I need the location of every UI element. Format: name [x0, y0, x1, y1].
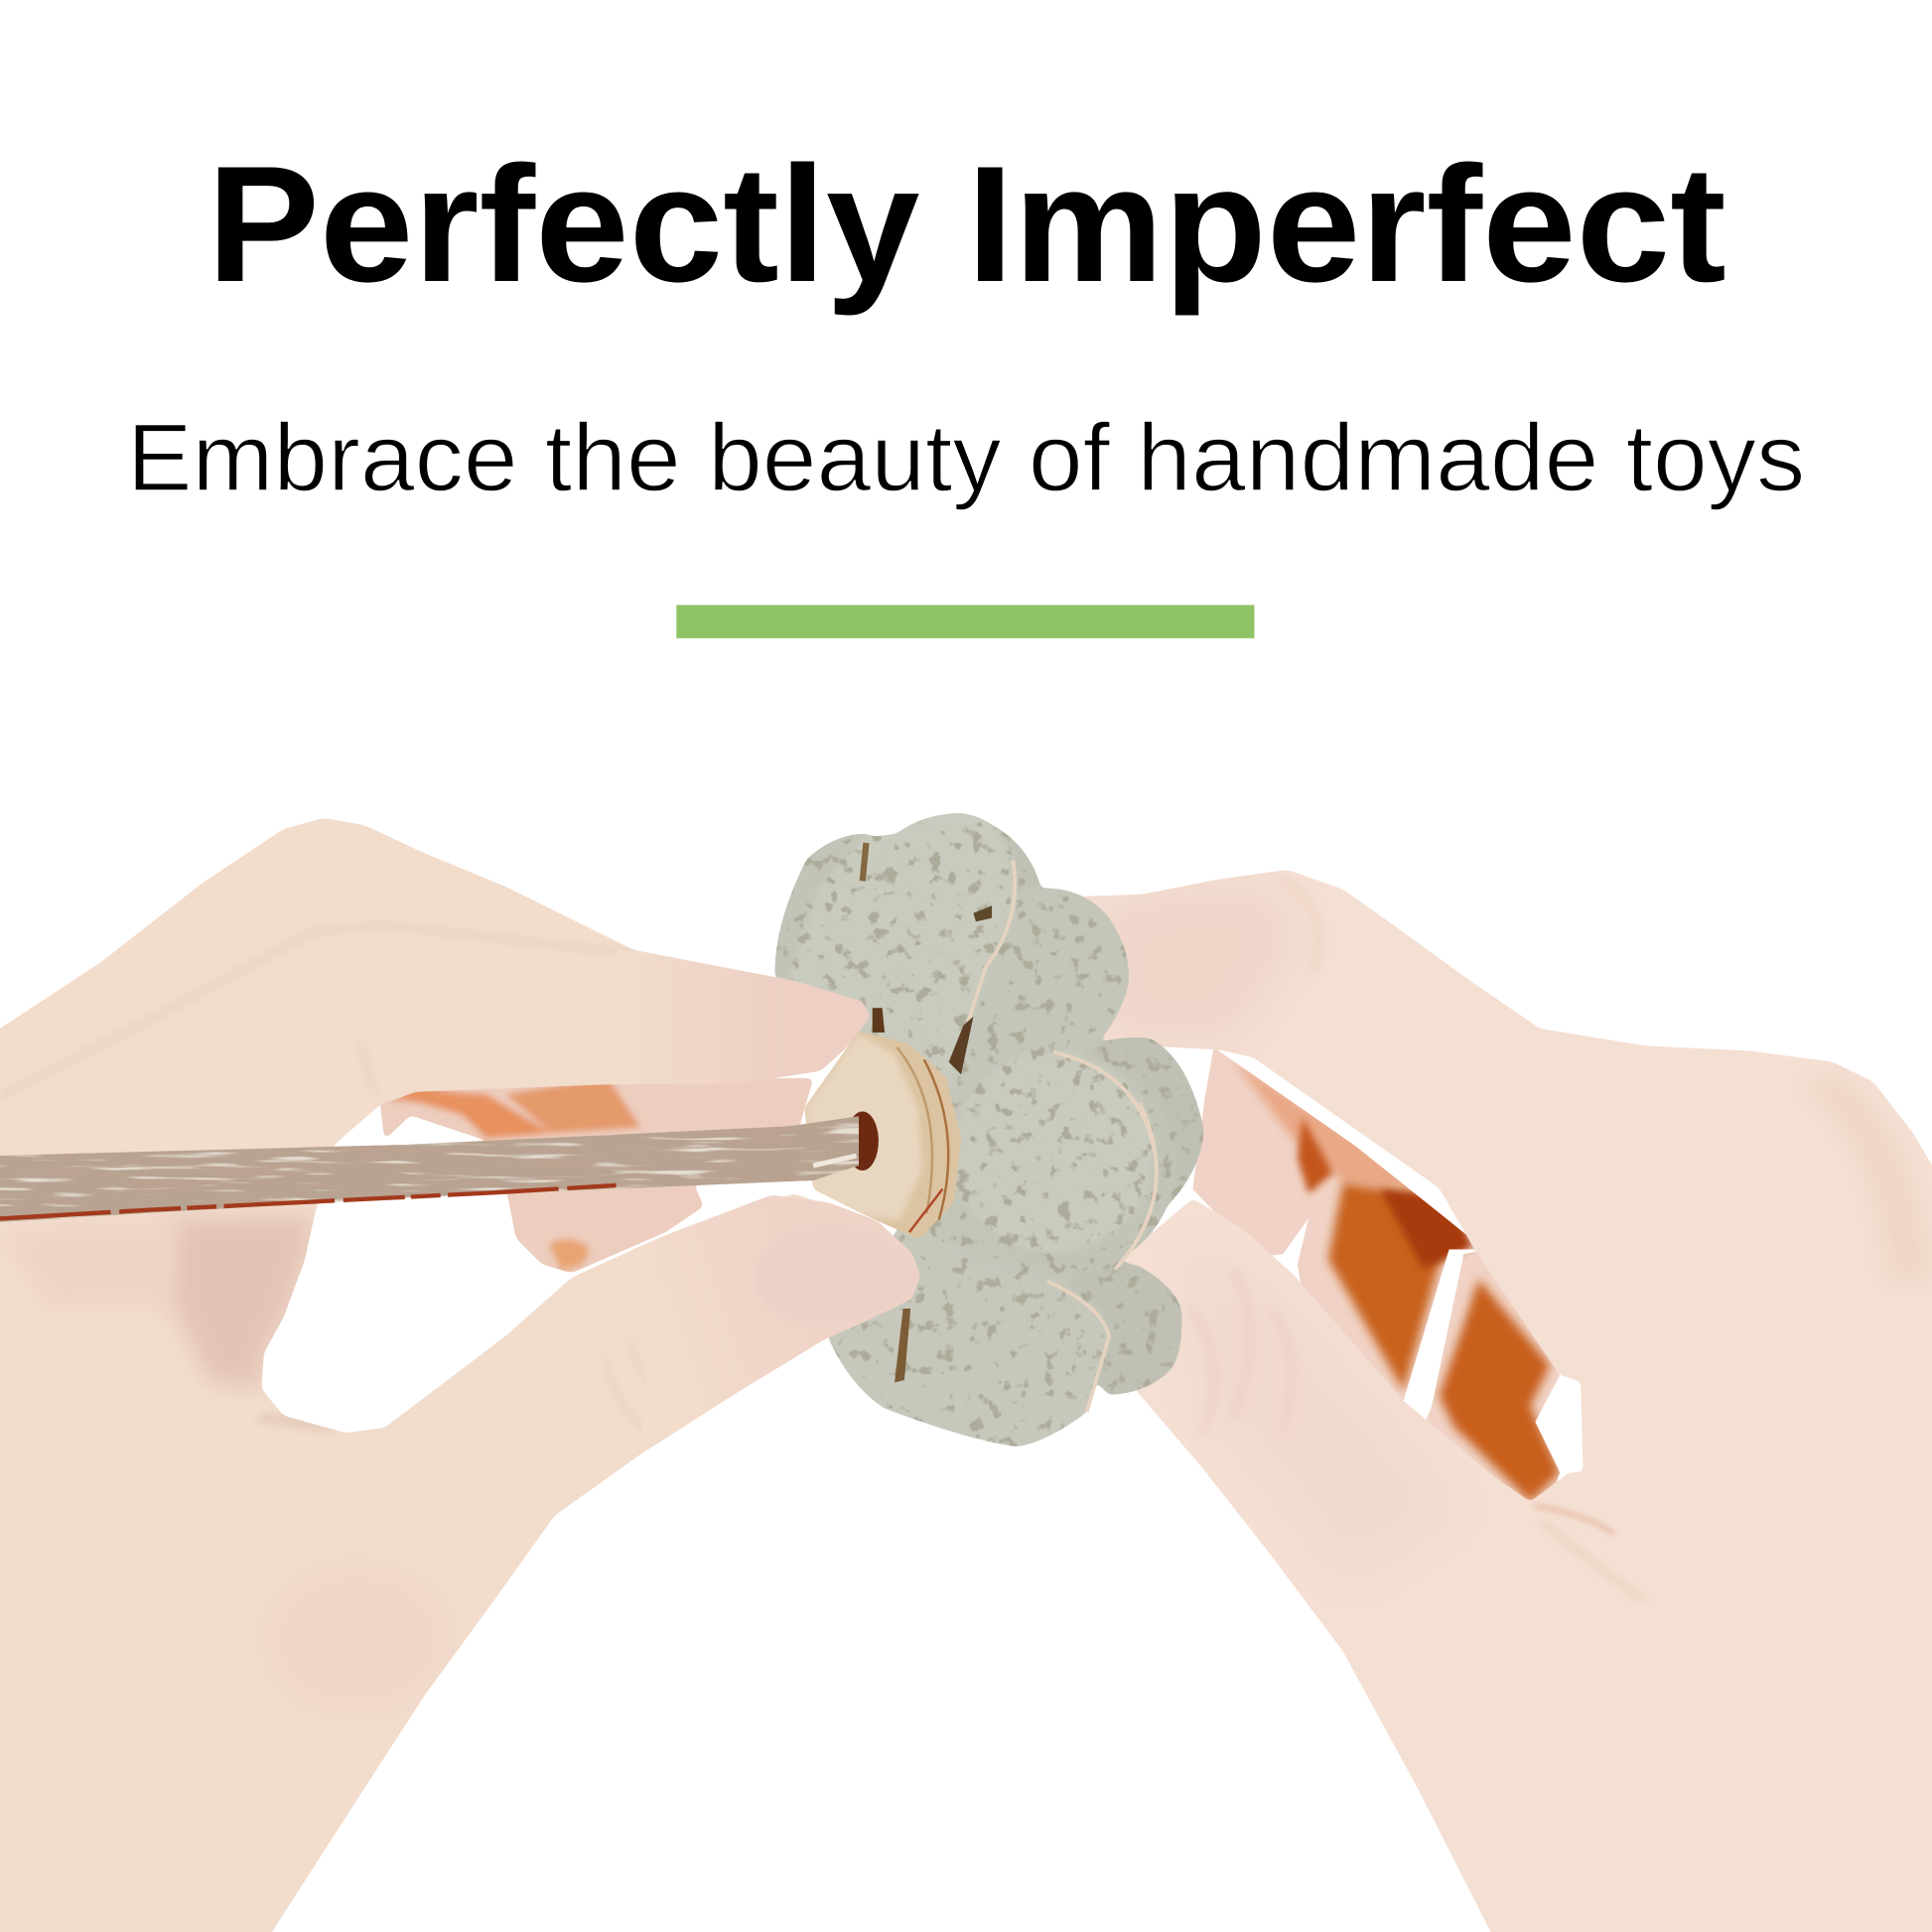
- wooden disc: [804, 1032, 961, 1240]
- center filler behind the disc: [863, 986, 1109, 1294]
- lower right petal: [1047, 1251, 1181, 1395]
- subtitle: Embrace the beauty of handmade toys: [127, 403, 1805, 511]
- photo: hands holding a handmade flower toy: [0, 801, 1932, 1932]
- dark gaps between petals: [949, 1017, 973, 1074]
- upper right petal: [949, 889, 1129, 1090]
- left hand: [0, 801, 936, 1932]
- index fingertip: [617, 949, 870, 1084]
- green divider bar: [676, 605, 1254, 638]
- front round petal: [954, 1052, 1154, 1252]
- lower petal: [828, 1207, 1109, 1447]
- right hand: [1059, 850, 1932, 1932]
- back top sliver: [973, 816, 1041, 961]
- white gap beside stick: [699, 1184, 763, 1206]
- speckled petals: [775, 813, 1204, 1447]
- wooden stick: [0, 1116, 859, 1222]
- middle right disc: [959, 1056, 1175, 1273]
- title: Perfectly Imperfect: [207, 132, 1726, 317]
- disc growth rings and hole: [847, 1047, 948, 1232]
- right back petal: [1072, 1037, 1204, 1207]
- thumb tip with nail: [640, 1195, 920, 1453]
- petal edge highlights: [956, 860, 1157, 1412]
- right hand back fingers: [1193, 1049, 1561, 1500]
- left hand back fingers: [379, 1077, 813, 1273]
- back left petal: [775, 834, 924, 1035]
- flower toy: [775, 813, 1204, 1447]
- front upper petal: [788, 813, 1015, 1090]
